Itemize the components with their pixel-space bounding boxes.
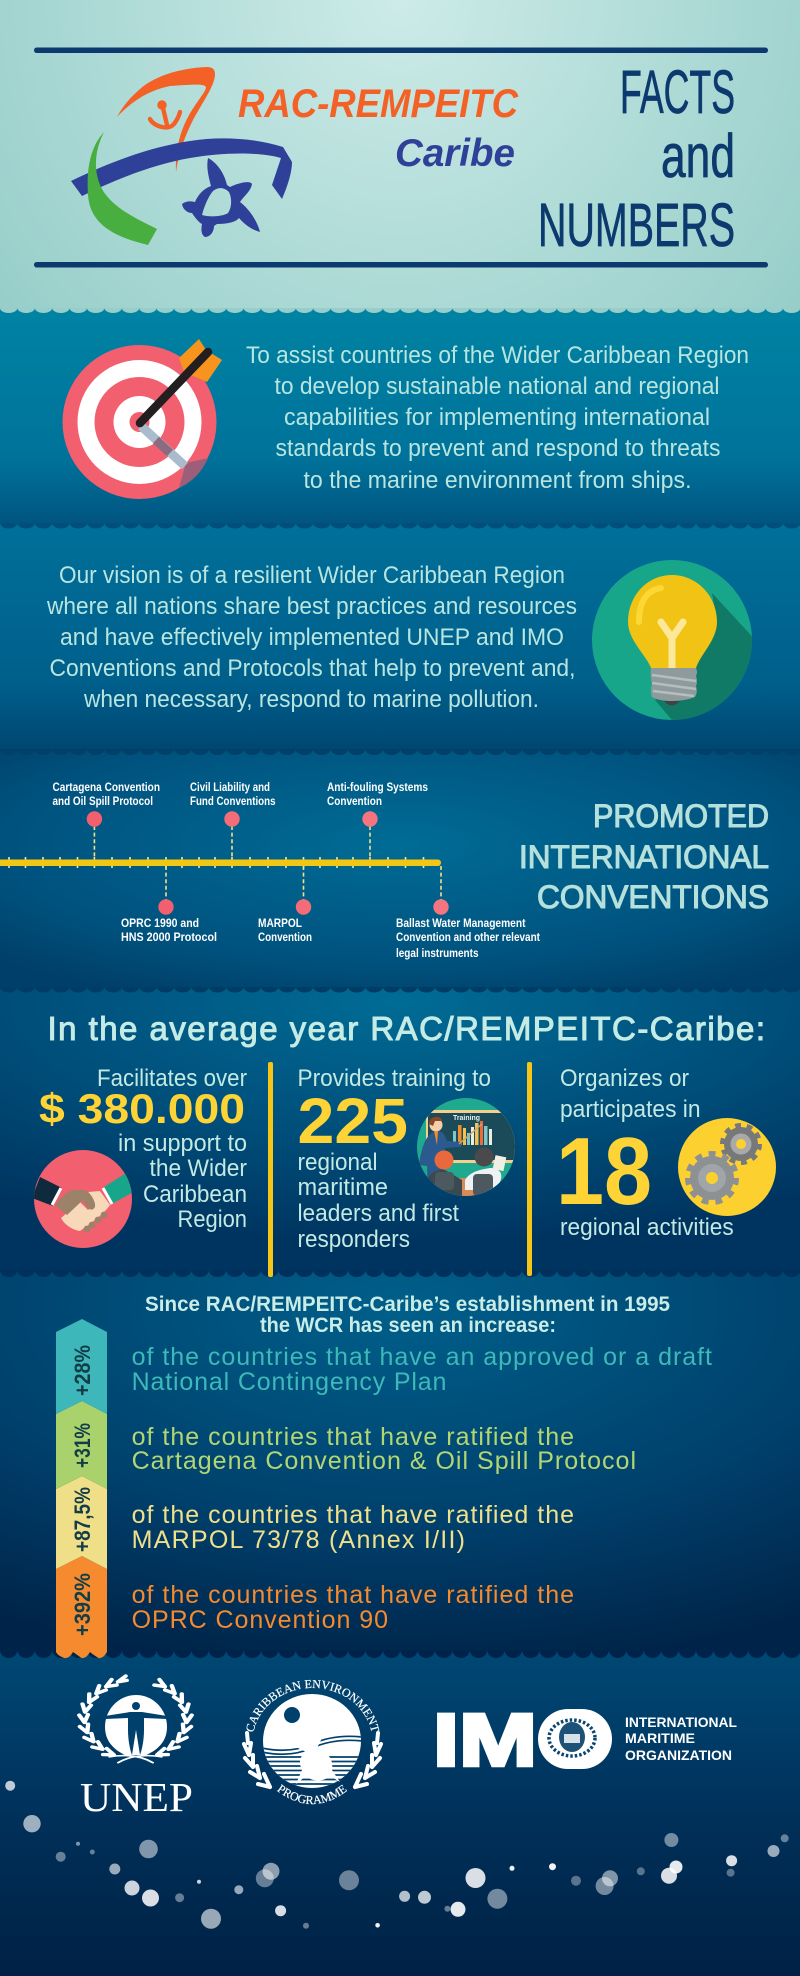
panel: mission [62, 339, 749, 499]
label: Ballast Water [396, 918, 540, 960]
training bars [453, 1121, 492, 1145]
fact: Cartagena: Cartagena Convention & Oil Spill Protocol [132, 1447, 636, 1475]
label: Anti-fouling: Anti-fouling Systems [327, 782, 428, 794]
fact: MARPOL: of the countries that have ratified the [132, 1501, 574, 1529]
segment: teal +28% [56, 1319, 107, 1414]
vision text: and have effectively implemented UNEP and IMO [60, 624, 564, 651]
IMO emblem [538, 1709, 612, 1769]
IMO name: INTERNATIONAL [625, 1714, 737, 1730]
label: Civil Liability [190, 782, 276, 808]
CEP emblem [262, 1694, 362, 1788]
label: OPRC [121, 918, 217, 944]
column: funding: Caribbean [143, 1181, 247, 1208]
label: Ballast Water: Ballast Water Management [396, 918, 526, 930]
panel: vision [46, 560, 760, 725]
logo: Caribbean Environment Programme [242, 1680, 384, 1804]
fact: MARPOL [132, 1501, 574, 1554]
column: training [298, 1065, 516, 1253]
label: MARPOL: MARPOL [258, 918, 302, 930]
vision text [46, 562, 577, 713]
panel: promoted conventions [0, 782, 769, 960]
vision text: Our vision is of a resilient Wider Caribbean Region [59, 562, 565, 589]
UNEP wordmark: UNEP [80, 1774, 193, 1820]
column: training: regional [298, 1149, 378, 1176]
column: activities: regional activities [560, 1214, 734, 1241]
panel: increases since 1995 [56, 1293, 712, 1658]
mission text [246, 342, 749, 494]
label: Cartagena [52, 782, 160, 808]
column: activities: Organizes or [560, 1065, 689, 1092]
mission text: to develop sustainable national and regional [274, 373, 720, 400]
segment: yellow +87,5%: +87,5% [70, 1487, 95, 1552]
divider right [527, 1062, 532, 1276]
icon: handshake [32, 1150, 133, 1248]
segment: orange +392%: +392% [70, 1573, 95, 1636]
fact: MARPOL: MARPOL 73/78 (Annex I/II) [132, 1526, 465, 1554]
large gear [688, 1154, 736, 1202]
segment: green +31% [56, 1401, 107, 1489]
heading: promoted international conventions: CONVENTIONS [537, 879, 769, 915]
label: Civil Liability: Fund Conventions [190, 796, 276, 808]
column: training: maritime [298, 1174, 388, 1201]
training number: 225 [298, 1085, 408, 1157]
label: Ballast Water: Convention and other relevant [396, 932, 540, 944]
heading: since establishment [145, 1293, 670, 1337]
segment: yellow +87,5% [56, 1476, 107, 1569]
logo sail [117, 67, 215, 172]
label: MARPOL [258, 918, 312, 944]
IMO name [625, 1714, 737, 1763]
timeline [0, 782, 540, 960]
teacher [420, 1131, 461, 1183]
heading: average year: In the average year RAC/REMPEITC-Caribe: [48, 1010, 765, 1047]
label: Civil Liability: Civil Liability and [190, 782, 270, 794]
fact: OPRC: of the countries that have ratified the [132, 1581, 574, 1609]
logo: UNEP [79, 1676, 193, 1820]
small gear [722, 1126, 760, 1162]
UNEP globe figure [105, 1695, 167, 1755]
logo anchor [150, 102, 180, 127]
CEP laurels [244, 1733, 381, 1787]
logo: RAC-REMPEITC Caribe [71, 67, 519, 245]
logo wordmark: RAC-REMPEITC [238, 82, 519, 126]
fact: Cartagena [132, 1423, 636, 1475]
icon: gears [678, 1118, 776, 1216]
label: Cartagena: and Oil Spill Protocol [52, 796, 153, 808]
title: and [661, 122, 735, 190]
students [433, 1178, 495, 1196]
IMO name: MARITIME [625, 1730, 695, 1746]
column: training: responders [298, 1226, 410, 1253]
funding number: $ 380.000 [39, 1085, 245, 1132]
timeline bar [0, 860, 441, 866]
panel: partner logos [77, 1674, 737, 1820]
fact: OPRC: OPRC Convention 90 [132, 1606, 388, 1634]
vision text: when necessary, respond to marine pollution. [83, 686, 539, 713]
icon: training room [417, 1098, 516, 1200]
label: Cartagena: Cartagena Convention [52, 782, 160, 794]
logo: IMO [433, 1698, 737, 1782]
logo blue arc [71, 138, 292, 199]
mission text: standards to prevent and respond to threats [276, 435, 720, 462]
timeline ticks [9, 857, 424, 868]
fact: OPRC [132, 1581, 574, 1634]
column: activities: participates in [560, 1096, 700, 1123]
vision text: where all nations share best practices and resources [46, 593, 577, 620]
segment: teal +28%: +28% [70, 1345, 95, 1396]
CEP circular text [246, 1680, 380, 1804]
label: Anti-fouling: Convention [327, 796, 382, 808]
timeline pins [87, 811, 449, 915]
CEP circular text: CARIBBEAN ENVIRONMENT [246, 1680, 380, 1732]
column: funding: in support to [118, 1130, 247, 1157]
heading: promoted international conventions [519, 798, 769, 915]
heading: promoted international conventions: PROMOTED [593, 798, 769, 834]
logo turtle [182, 158, 260, 237]
column: funding [32, 1065, 247, 1248]
column: funding: Region [178, 1206, 247, 1233]
fact: national contingency plan [132, 1343, 712, 1396]
IMO name: ORGANIZATION [625, 1747, 732, 1763]
IMO letters: IMO [433, 1698, 610, 1782]
logo green arc [88, 132, 157, 245]
training board label: Training [453, 1115, 480, 1122]
column: training: leaders and first [298, 1200, 459, 1227]
mission text: capabilities for implementing international [284, 404, 710, 431]
heading: promoted international conventions: INTERNATIONAL [519, 839, 769, 875]
column: training: Provides training to [298, 1065, 491, 1092]
icon: target with arrow [62, 339, 222, 499]
divider left [268, 1062, 273, 1277]
column: activities [556, 1065, 776, 1241]
label: Anti-fouling [327, 782, 428, 808]
segment: green +31%: +31% [70, 1423, 95, 1468]
column: funding: Facilitates over [97, 1065, 247, 1092]
activities number: 18 [556, 1118, 652, 1225]
mission text: To assist countries of the Wider Caribbean Region [246, 342, 749, 369]
column: funding: the Wider [150, 1155, 247, 1182]
CEP circular text: PROGRAMME [276, 1784, 347, 1804]
fact: Cartagena: of the countries that have ratified the [132, 1423, 574, 1451]
fact: national contingency plan: National Contingency Plan [132, 1368, 446, 1396]
timeline dashed connectors [94, 826, 441, 900]
label: Ballast Water: legal instruments [396, 948, 478, 960]
logo Caribe: Caribe [395, 132, 515, 175]
vision text: Conventions and Protocols that help to prevent and, [50, 655, 576, 682]
title [538, 58, 735, 259]
label: MARPOL: Convention [258, 932, 312, 944]
UNEP laurel [79, 1676, 192, 1763]
panel: average year [32, 1010, 776, 1277]
mission text: to the marine environment from ships. [304, 467, 692, 494]
label: OPRC: HNS 2000 Protocol [121, 932, 217, 944]
fact: national contingency plan: of the countries that have an approved or a draft [132, 1343, 712, 1371]
label: OPRC: OPRC 1990 and [121, 918, 199, 930]
decoration: bubbles [5, 1781, 789, 1929]
segment: orange +392% [56, 1556, 107, 1658]
icon: light bulb [592, 560, 760, 725]
arrow stack [56, 1319, 107, 1658]
panel: header [34, 48, 768, 268]
heading: since establishment: the WCR has seen an increase: [260, 1314, 556, 1337]
heading: since establishment: Since RAC/REMPEITC-Caribe’s establishment in 1995 [145, 1293, 670, 1316]
